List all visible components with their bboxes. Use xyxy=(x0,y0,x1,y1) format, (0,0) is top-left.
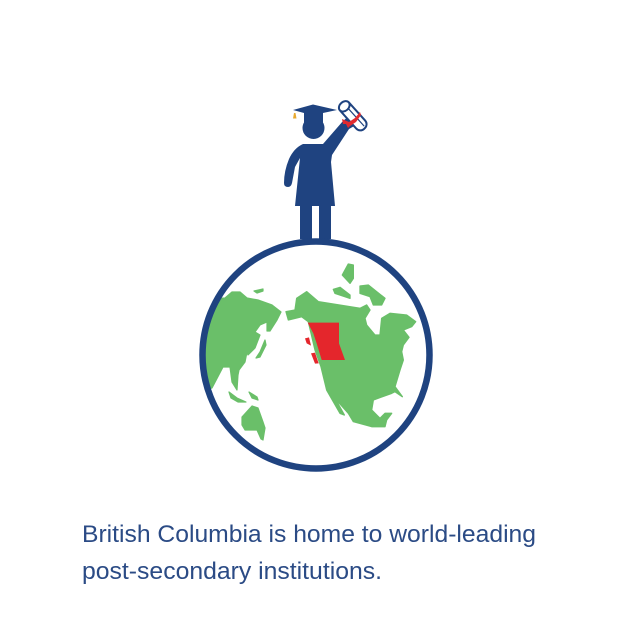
legs xyxy=(300,204,331,239)
diploma xyxy=(337,99,369,133)
red ribbon xyxy=(342,112,361,128)
body, raised arm and skirt xyxy=(284,116,356,206)
continents: North America xyxy=(286,264,416,427)
mortarboard cap xyxy=(293,104,337,124)
BC coastal islands xyxy=(305,337,319,364)
New Guinea xyxy=(249,392,258,400)
tassel xyxy=(293,113,296,118)
infographic xyxy=(84,100,534,584)
continents: Asia and Australia xyxy=(195,289,281,440)
Australia xyxy=(242,406,265,440)
globe outline xyxy=(202,242,430,468)
head xyxy=(302,117,324,139)
caption line 1: British Columbia is home to world-leading xyxy=(82,521,536,548)
Arctic islands xyxy=(333,264,385,305)
Russian far-east island xyxy=(254,289,263,293)
Japan xyxy=(256,340,266,358)
caption line 2: post-secondary institutions. xyxy=(82,558,382,585)
globe fill xyxy=(203,242,429,468)
British Columbia in red xyxy=(308,323,345,360)
globe xyxy=(195,242,430,468)
caption xyxy=(82,521,536,585)
Indonesia xyxy=(229,392,246,402)
graduate figure xyxy=(284,99,369,239)
